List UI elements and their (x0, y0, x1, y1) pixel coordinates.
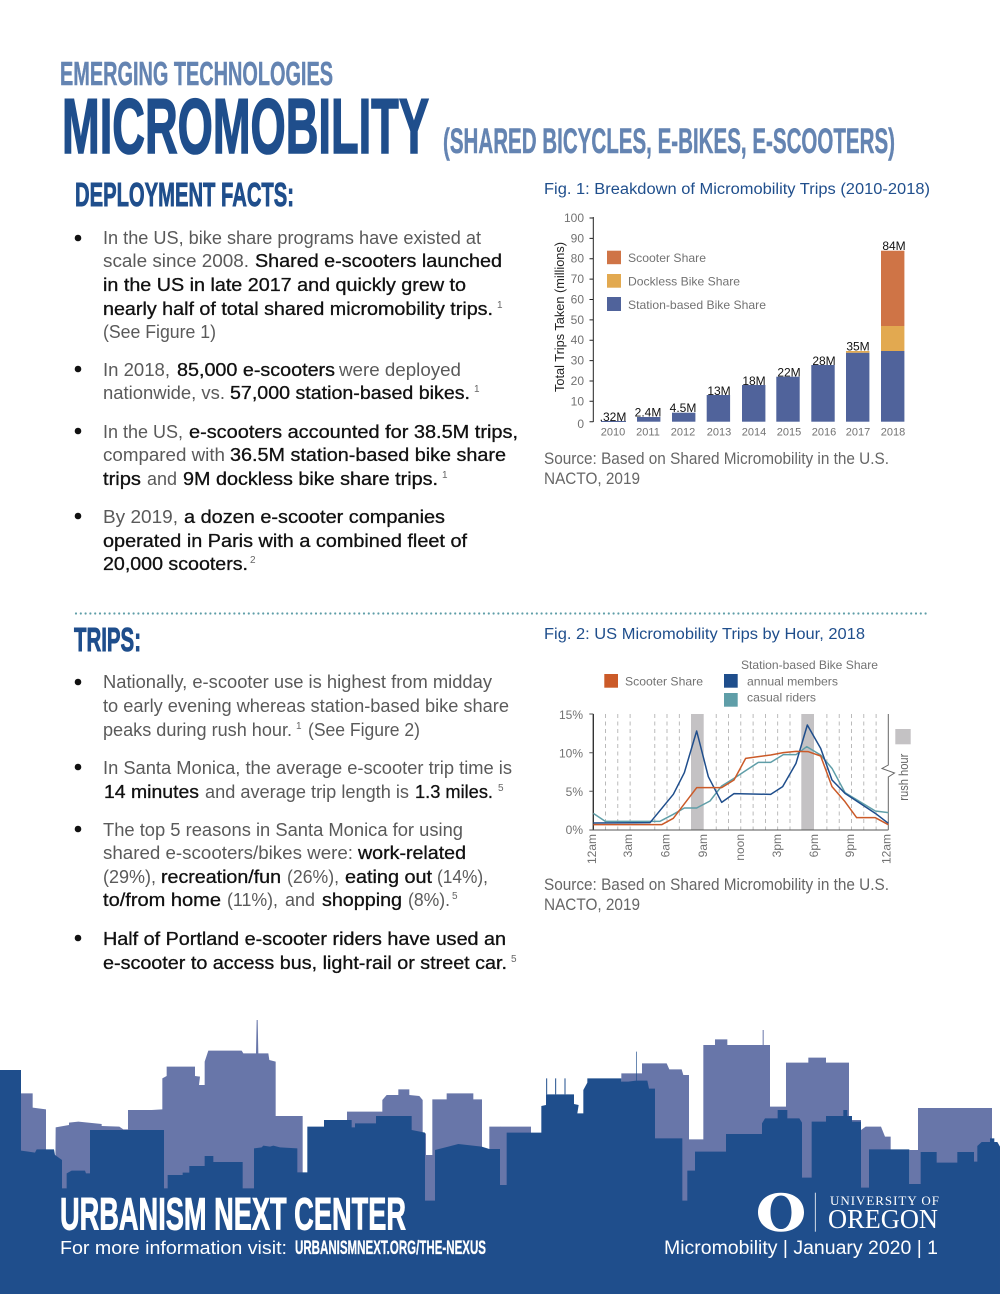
bullet: trips by mode: 9M dockless bike share trips. (183, 468, 438, 489)
y axis labels: 0% (566, 823, 583, 837)
x axis labels: 2016 (812, 427, 836, 439)
legend: Station-based Bike Share (741, 658, 878, 672)
source note: figure 1: Source: Based on Shared Micromobility in the U.S. (544, 450, 889, 468)
heading: deployment facts: DEPLOYMENT FACTS: (75, 177, 294, 214)
bullet: bike share history: nearly half of total shared micromobility trips. (103, 298, 493, 319)
legend: Station-based Bike Share (628, 298, 766, 312)
y axis labels (559, 708, 583, 837)
source note: figure 1 (544, 450, 889, 488)
hour labels: 3am (621, 834, 635, 857)
bullet: santa monica trip time: In Santa Monica, the average e-scooter trip time is (103, 757, 512, 778)
logo: university of oregon (758, 1193, 939, 1234)
hour labels (585, 834, 894, 864)
y axis: 80 (571, 252, 584, 266)
bullet: portland: Half of Portland e-scooter riders have used an (103, 928, 506, 949)
bullet: e-scooters deployed: In 2018, (103, 359, 170, 380)
bullet: e-scooters deployed (75, 359, 480, 403)
bullet: trips by mode: e-scooters accounted for 38.5M trips, (189, 421, 518, 442)
bullet: bike share history: In the US, bike share programs have existed at (103, 227, 481, 248)
bullet: national use: peaks during rush hour. (103, 719, 292, 740)
bar value labels: 22M (777, 366, 801, 380)
text block: trips bullets (75, 671, 517, 973)
line chart: trips by hour (559, 658, 911, 864)
legend: Dockless Bike Share (628, 275, 740, 289)
figure 2 title: Fig. 2: US Micromobility Trips by Hour, 2018 (544, 626, 865, 643)
bullet: paris: a dozen e-scooter companies (184, 506, 445, 527)
bullet: top reasons: recreation/fun (161, 866, 281, 887)
footer: urbanism next center: For more information visit: (60, 1237, 287, 1258)
y axis (564, 211, 593, 431)
rush hour key: rush hour (896, 753, 911, 801)
bullet: portland: 5 (511, 954, 517, 965)
y axis title: Total Trips Taken (millions) (552, 242, 567, 392)
bullet: paris (75, 506, 468, 574)
bullet: national use: (See Figure 2) (308, 719, 420, 740)
y axis labels: 15% (559, 708, 583, 722)
bar value labels (600, 239, 906, 424)
bullet: paris: 20,000 scooters. (103, 553, 248, 574)
header (60, 56, 895, 170)
hour labels: 12am (585, 834, 599, 864)
hour labels: 12am (880, 834, 894, 864)
bullet: portland (75, 928, 517, 973)
x axis labels: 2013 (707, 427, 731, 439)
bullet: bike share history (75, 227, 503, 342)
bar value labels: 35M (846, 340, 870, 354)
bullet: trips by mode: trips (103, 468, 141, 489)
bullet: trips by mode: 36.5M station-based bike share (230, 444, 506, 465)
y axis: 30 (571, 354, 584, 368)
bullet: paris: 2 (250, 555, 256, 566)
bars (601, 251, 904, 422)
bullet: national use: Nationally, e-scooter use is highest from midday (103, 671, 493, 692)
bullet: top reasons: and (285, 889, 315, 910)
y axis labels: 5% (566, 785, 583, 799)
bar value labels: 28M (812, 354, 836, 368)
x axis labels: 2011 (636, 427, 660, 439)
bar value labels: .32M (600, 410, 626, 424)
y axis: 20 (571, 374, 584, 388)
heading: trips: TRIPS: (74, 622, 141, 659)
figure 1 title: Fig. 1: Breakdown of Micromobility Trips (2010-2018) (544, 181, 930, 198)
y axis labels: 10% (559, 746, 583, 760)
y axis: 60 (571, 292, 584, 306)
bullet: e-scooters deployed: 85,000 e-scooters (177, 359, 335, 380)
hour labels: 6pm (807, 834, 821, 857)
hour labels: noon (733, 834, 747, 861)
bullet: bike share history: in the US in late 2017 and quickly grew to (103, 274, 466, 295)
x axis labels: 2015 (777, 427, 801, 439)
y axis: 70 (571, 272, 584, 286)
x axis labels: 2014 (742, 427, 766, 439)
bar value labels: 13M (707, 384, 731, 398)
y axis: 10 (571, 394, 584, 408)
y axis: 90 (571, 231, 584, 245)
kicker: emerging technologies: EMERGING TECHNOLOGIES (60, 56, 333, 93)
hour labels: 9pm (843, 834, 857, 857)
skyline: left half (0, 1020, 500, 1294)
x axis labels: 2010 (601, 427, 625, 439)
x axis labels: 2018 (881, 427, 905, 439)
text block: deployment facts bullets (75, 227, 518, 574)
bullet: e-scooters deployed: nationwide, vs. (103, 382, 225, 403)
bullet: top reasons: (8%). (408, 889, 450, 910)
y axis: 50 (571, 313, 584, 327)
bullet: top reasons: The top 5 reasons in Santa Monica for using (103, 819, 463, 840)
bullet: trips by mode: 1 (442, 470, 448, 481)
logo: university of oregon: OREGON (828, 1203, 938, 1234)
footer: issue line: Micromobility | January 2020 | 1 (664, 1238, 938, 1259)
legend (604, 658, 878, 707)
legend (607, 251, 766, 312)
bar value labels: 2.4M (635, 406, 661, 420)
bullet: trips by mode: compared with (103, 444, 225, 465)
bullet: top reasons: (29%), (103, 866, 156, 887)
bullet: santa monica trip time: and average trip length is (205, 781, 409, 802)
bullet: top reasons: (26%), (287, 866, 339, 887)
x axis labels: 2017 (846, 427, 870, 439)
skyline: right half (500, 1030, 1000, 1294)
bullet: top reasons: work-related (357, 842, 466, 863)
bullet: portland: e-scooter to access bus, light-rail or street car. (103, 952, 507, 973)
bullet: santa monica trip time: 5 (498, 783, 504, 794)
y axis: 40 (571, 333, 584, 347)
bullet: national use (75, 671, 509, 740)
bullet: national use: to early evening whereas station-based bike share (103, 695, 509, 716)
bullet: bike share history: scale since 2008. (103, 250, 249, 271)
source note: figure 2 (544, 876, 889, 914)
bullet: e-scooters deployed: were deployed (338, 359, 461, 380)
footer: urbanism next center (60, 1188, 486, 1259)
rush hour bands (691, 714, 814, 830)
bullet: top reasons: shared e-scooters/bikes were: (103, 842, 353, 863)
bar chart: micromobility trips (552, 211, 906, 439)
footer: urbanism next center: URBANISM NEXT CENTER (60, 1188, 406, 1239)
bullet: e-scooters deployed: 57,000 station-based bikes. (230, 382, 470, 403)
legend: annual members (747, 675, 838, 689)
bullet: e-scooters deployed: 1 (474, 384, 480, 395)
bar value labels: 18M (742, 374, 766, 388)
x axis labels: 2012 (671, 427, 695, 439)
bullet: bike share history: Shared e-scooters launched (255, 250, 502, 271)
bullet: bike share history: 1 (497, 300, 503, 311)
bullet: top reasons: 5 (452, 891, 458, 902)
bullet: santa monica trip time (75, 757, 512, 802)
axes (589, 714, 894, 830)
bullet: trips by mode: In the US, (103, 421, 183, 442)
hour labels: 6am (659, 834, 673, 857)
bar value labels: 4.5M (670, 401, 696, 415)
bullet: national use: 1 (296, 721, 302, 732)
data lines (593, 725, 888, 825)
icon: O mark (758, 1193, 804, 1232)
source note: figure 1: NACTO, 2019 (544, 470, 640, 488)
source note: figure 2: Source: Based on Shared Micromobility in the U.S. (544, 876, 889, 894)
bullet: top reasons: (14%), (437, 866, 488, 887)
legend: Scooter Share (628, 251, 706, 265)
bullet: top reasons: shopping (322, 889, 402, 910)
bullet: santa monica trip time: 1.3 miles. (415, 781, 493, 802)
bullet: bike share history: (See Figure 1) (103, 321, 216, 342)
bullet: top reasons (75, 819, 488, 910)
hour labels: 3pm (770, 834, 784, 857)
legend: Scooter Share (625, 675, 703, 689)
footer skyline (0, 1020, 1000, 1294)
bullet: santa monica trip time: 14 minutes (104, 781, 199, 802)
x axis labels (601, 427, 905, 439)
bullet: paris: operated in Paris with a combined fleet of (103, 530, 468, 551)
title: micromobility: MICROMOBILITY (62, 84, 429, 170)
bullet: trips by mode: and (147, 468, 177, 489)
bullet: trips by mode (75, 421, 518, 489)
bullet: paris: By 2019, (103, 506, 178, 527)
bullet: top reasons: (11%), (227, 889, 278, 910)
legend: casual riders (747, 691, 816, 705)
y axis: 0 (577, 417, 584, 431)
source note: figure 2: NACTO, 2019 (544, 896, 640, 914)
bar value labels: 84M (882, 239, 906, 253)
hour labels: 9am (696, 834, 710, 857)
bullet: top reasons: to/from home (103, 889, 221, 910)
footer: urbanism next center: URBANISMNEXT.ORG/THE-NEXUS (295, 1238, 486, 1259)
y axis: 100 (564, 211, 584, 225)
logo: university of oregon: UNIVERSITY OF (830, 1193, 939, 1208)
bullet: top reasons: eating out (345, 866, 432, 887)
